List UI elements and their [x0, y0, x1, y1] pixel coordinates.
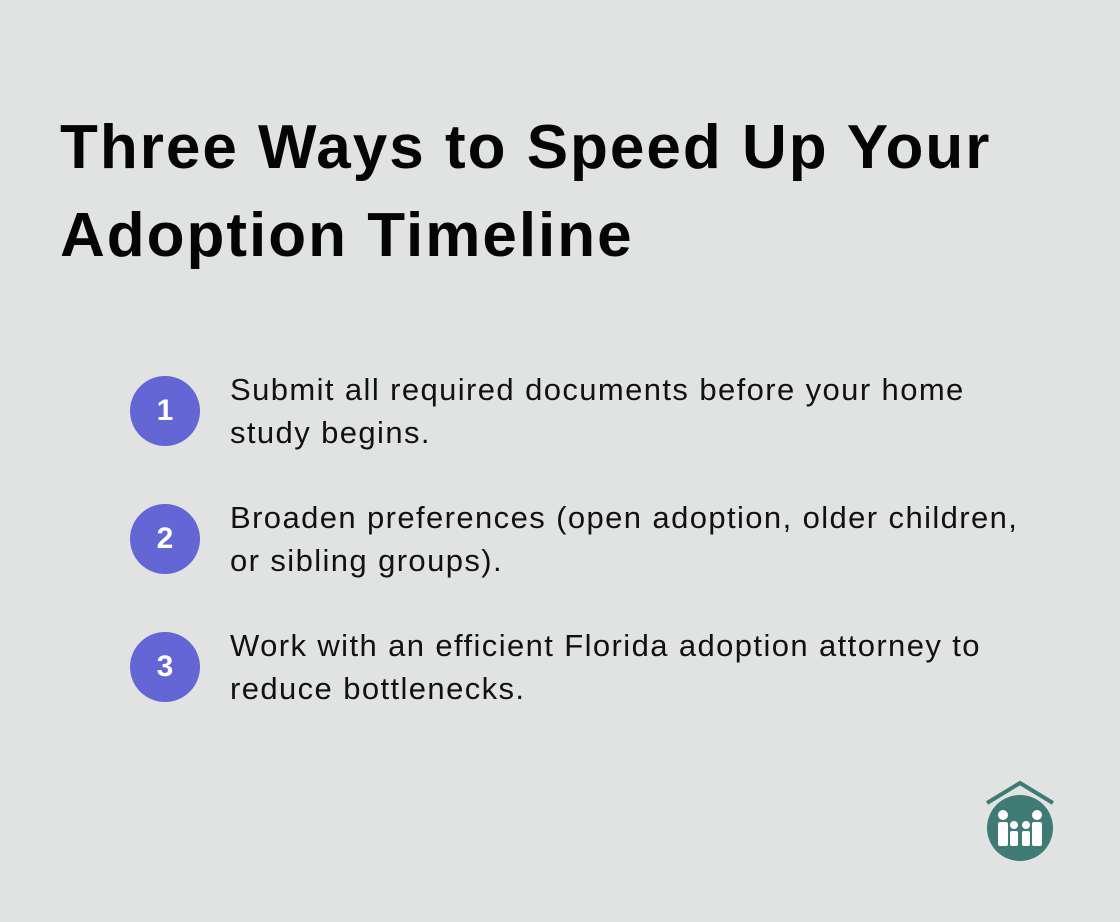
title: Adoption Timeline [60, 201, 634, 270]
item 1 [130, 372, 965, 450]
text 2 [230, 500, 1018, 578]
text 1 [230, 372, 965, 450]
title [60, 113, 991, 270]
text 1: Submit all required documents before your home [230, 372, 965, 407]
text 3: reduce bottlenecks. [230, 671, 525, 706]
text 2: or sibling groups). [230, 543, 503, 578]
number badge 1: 1 [157, 394, 173, 427]
text 3 [230, 628, 981, 706]
text 1: study begins. [230, 415, 431, 450]
item 2 [130, 500, 1018, 578]
number badge 2 [130, 504, 200, 574]
item 3 [130, 628, 981, 706]
number badge 1 [130, 376, 200, 446]
icon: logo [986, 780, 1054, 861]
text 3: Work with an efficient Florida adoption attorney to [230, 628, 981, 663]
number badge 3 [130, 632, 200, 702]
number badge 3: 3 [157, 650, 173, 683]
number badge 2: 2 [157, 522, 173, 555]
title: Three Ways to Speed Up Your [60, 113, 991, 182]
text 2: Broaden preferences (open adoption, older children, [230, 500, 1018, 535]
